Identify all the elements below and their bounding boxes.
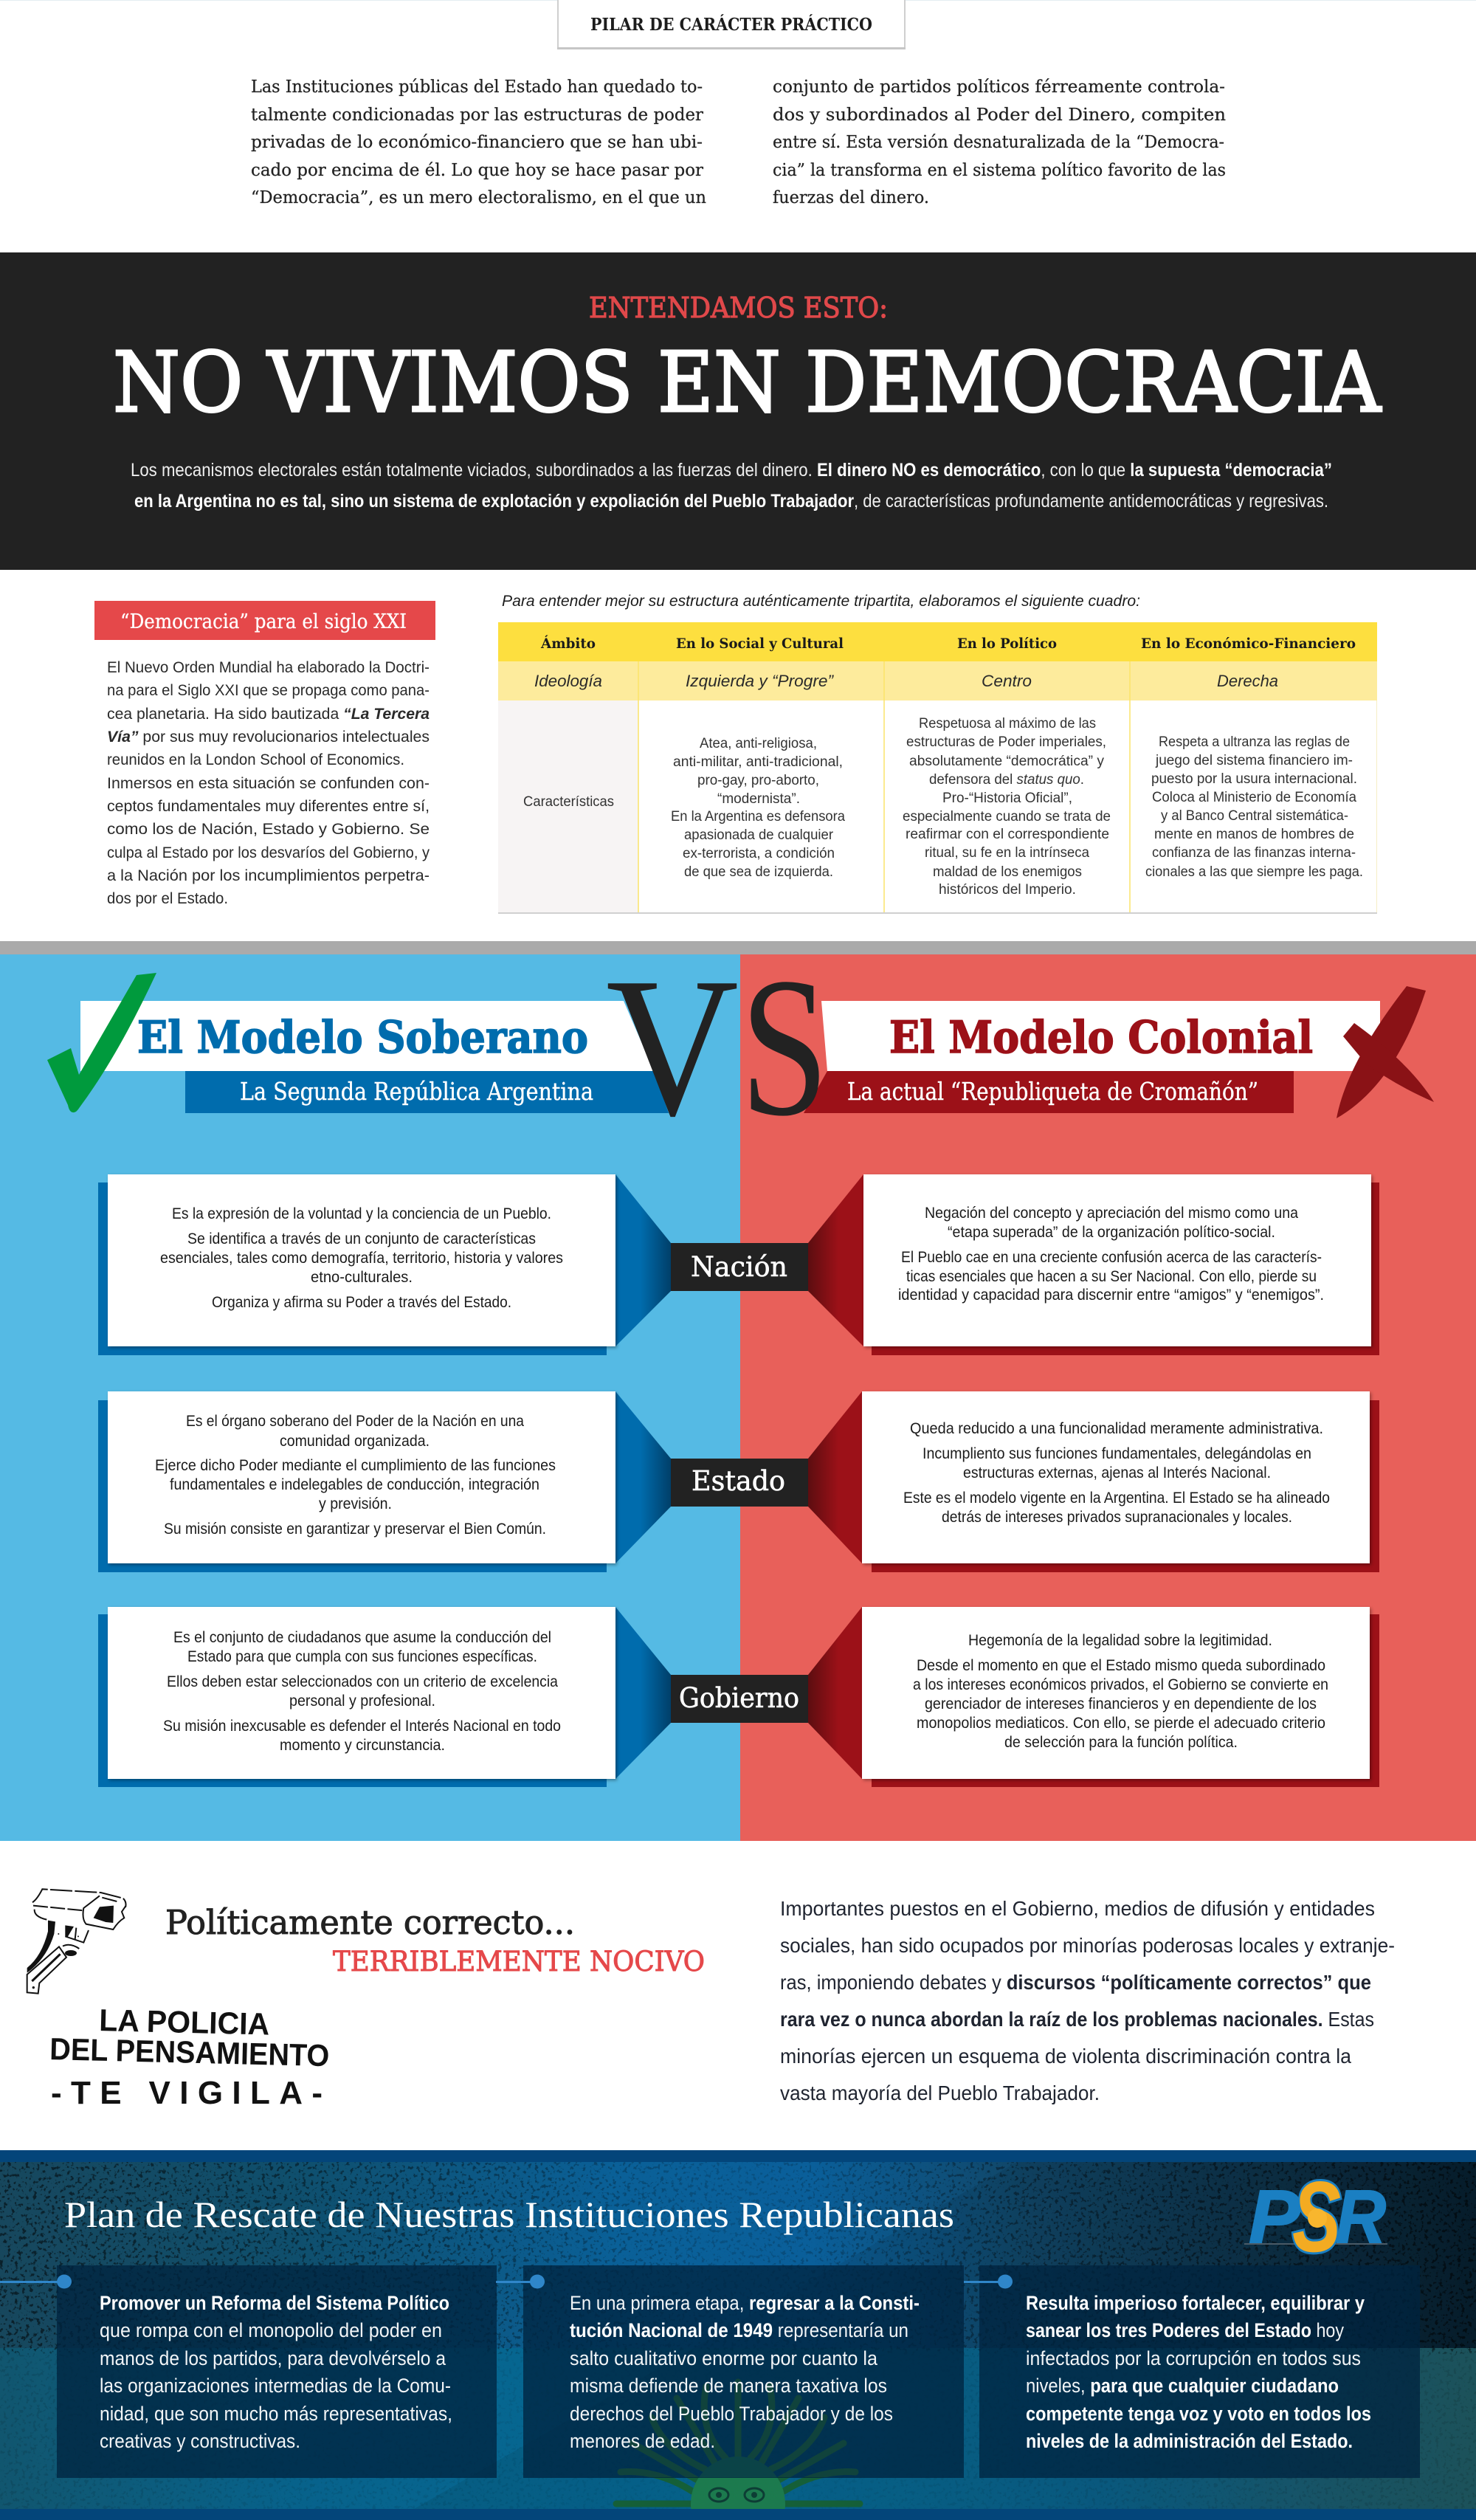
card: Estado colonial: detrás de intereses privados supranacionales y locales.: [942, 1509, 1292, 1526]
column: político: reafirmar con el correspondiente: [906, 827, 1109, 842]
card: Nación colonial: Negación del concepto y apreciación del mismo como una: [925, 1205, 1298, 1222]
card: Constitución de 1949: misma defiende de manera taxativa los: [570, 2375, 887, 2397]
card: Constitución de 1949: En una primera etapa, regresar a la Consti-: [570, 2292, 920, 2314]
main title: NO VIVIMOS EN DEMOCRACIA: [113, 335, 1382, 431]
column: político: maldad de los enemigos: [933, 864, 1082, 880]
table intro sentence: Para entender mejor su estructura auténticamente tripartita, elaboramos el siguiente cuadro:: [502, 593, 1140, 610]
card: Constitución de 1949: tución Nacional de 1949 representaría un: [570, 2319, 908, 2341]
card: Estado colonial: [808, 1391, 1379, 1572]
text block: discursos políticamente correctos: sociales, han sido ocupados por minorías poderosas locales y extranje-: [780, 1934, 1395, 1957]
card: Reforma del Sistema Político: [57, 2265, 497, 2478]
icon: flag sun: [616, 2382, 860, 2520]
logo: PSR: [1244, 2161, 1387, 2273]
icon: green check mark: [47, 973, 156, 1112]
row: Nación: [98, 1174, 1379, 1355]
side text block: na para el Siglo XXI que se propaga como pana-: [107, 682, 430, 699]
table row: ideología: Derecha: [1217, 672, 1278, 690]
card: Reforma del Sistema Político: Promover un Reforma del Sistema Político: [100, 2292, 449, 2314]
card: Constitución de 1949: [523, 2265, 964, 2478]
intro text: two columns: “Democracia”, es un mero electoralismo, en el que un: [251, 188, 706, 207]
card: Reforma del Sistema Político: las organizaciones intermedias de la Comu-: [100, 2375, 451, 2397]
intro text: two columns: Las Instituciones públicas del Estado han quedado to-: [251, 78, 703, 97]
intro text: two columns: privadas de lo económico-financiero que se han ubi-: [251, 133, 703, 152]
column: político: Respetuosa al máximo de las: [919, 716, 1096, 731]
icon: red cross mark: [1337, 986, 1434, 1118]
intro text: two columns: [251, 78, 1226, 207]
card: Nación soberano: [98, 1174, 671, 1355]
heading: El Modelo Soberano: El Modelo Soberano: [137, 1012, 588, 1064]
card: Gobierno colonial: monopolios mediaticos. Con ello, se pierde el adecuado criterio: [917, 1715, 1325, 1732]
column: social y cultural: apasionada de cualquier: [684, 827, 834, 843]
card: Gobierno colonial: a los intereses económicos privados, el Gobierno se convierte en: [913, 1676, 1328, 1693]
heading: El Modelo Colonial: El Modelo Colonial: [889, 1012, 1313, 1064]
intro text: two columns: talmente condicionadas por las estructuras de poder: [251, 106, 703, 125]
column: político: especialmente cuando se trata de: [903, 809, 1111, 824]
row: Gobierno: [98, 1607, 1379, 1787]
column: económico-financiero: confianza de las finanzas interna-: [1152, 845, 1356, 861]
table row: ideología: Ideología: [534, 672, 602, 690]
card: Estado colonial: Queda reducido a una funcionalidad meramente administrativa.: [910, 1420, 1323, 1437]
logo: PSR: P: [1249, 2175, 1300, 2259]
heading: El Modelo Colonial: La actual “Republiqueta de Cromañón”: [847, 1077, 1258, 1106]
side text block: El Nuevo Orden Mundial ha elaborado la Doctri-: [107, 659, 430, 676]
heading: Políticamente correcto: TERRIBLEMENTE NOCIVO: [333, 1946, 705, 1977]
column: económico-financiero: juego del sistema financiero im-: [1155, 753, 1353, 768]
column: económico-financiero: Coloca al Ministerio de Economía: [1152, 790, 1356, 805]
panel: versus backgrounds: [0, 954, 1476, 1841]
logo: PSR: S: [1292, 2161, 1341, 2273]
column: social y cultural: Atea, anti-religiosa,: [700, 736, 817, 751]
divider bar: [0, 941, 1476, 954]
card: Gobierno colonial: [808, 1607, 1379, 1787]
side text block: reunidos en la London School of Economics.: [107, 751, 404, 768]
card: Constitución de 1949: salto cualitativo enorme por cuanto la: [570, 2347, 878, 2369]
card: Nación soberano: esenciales, tales como demografía, territorio, historia y valores: [160, 1250, 563, 1267]
column: político: absolutamente “democrática” y: [909, 754, 1105, 769]
heading: El Modelo Soberano: [80, 1001, 669, 1113]
side text block: dos por el Estado.: [107, 890, 228, 907]
card: Nación colonial: identidad y capacidad para discernir entre “amigos” y “enemigos”.: [898, 1287, 1324, 1304]
side text block: a la Nación por los incumplimientos perpetra-: [107, 867, 430, 884]
side text block: como los de Nación, Estado y Gobierno. Se: [107, 821, 430, 838]
card: Constitución de 1949: derechos del Pueblo Trabajador y de los: [570, 2403, 893, 2425]
card: Nación colonial: “etapa superada” de la organización político-social.: [948, 1224, 1275, 1241]
card: Nación colonial: El Pueblo cae en una creciente confusión acerca de las caracterís-: [901, 1249, 1322, 1266]
card: Nación soberano: etno-culturales.: [311, 1269, 413, 1286]
card: Estado colonial: Incumpliento sus funciones fundamentales, delegándolas en: [922, 1445, 1311, 1462]
heading: Políticamente correcto: [165, 1903, 705, 1977]
text block: discursos políticamente correctos: ras, imponiendo debates y discursos “políticamente correctos” que: [780, 1971, 1371, 1994]
column: político: históricos del Imperio.: [939, 882, 1076, 898]
title: VS: V: [606, 937, 739, 1157]
card: Poderes del Estado: niveles de la administración del Estado.: [1026, 2430, 1353, 2452]
column: político: Pro-“Historia Oficial”,: [942, 791, 1072, 806]
red heading: “Democracia” para el siglo XXI: [120, 610, 407, 633]
intro text: two columns: entre sí. Esta versión desnaturalizada de la “Democra-: [773, 133, 1224, 152]
card: Poderes del Estado: competente tenga voz y voto en todos los: [1026, 2403, 1371, 2425]
connectors: timeline dots: [0, 2275, 1013, 2288]
icon: surveillance camera: [27, 1889, 126, 1994]
table row: ideología: Centro: [982, 672, 1032, 690]
card: Reforma del Sistema Político: que rompa con el monopolio del poder en: [100, 2319, 442, 2341]
red heading: [94, 601, 435, 640]
card: Estado soberano: Su misión consiste en garantizar y preservar el Bien Común.: [164, 1521, 546, 1538]
title: VS: [606, 937, 829, 1157]
table row: características: Características: [523, 794, 614, 810]
table header row: [540, 635, 1356, 652]
card: Nación colonial: ticas esenciales que hacen a su Ser Nacional. Con ello, pierde su: [906, 1268, 1317, 1285]
column: económico-financiero: puesto por la usura internacional.: [1151, 771, 1357, 787]
title: VS: S: [740, 937, 829, 1157]
card: Estado soberano: y previsión.: [319, 1495, 392, 1512]
headline explanatory text: en la Argentina no es tal, sino un sistema de explotación y expoliación del Pueblo Trabajador, de características profundamente antidemocráticas y regresivas.: [134, 491, 1328, 512]
column: político: ritual, su fe en la intrínseca: [925, 845, 1089, 861]
card: Gobierno colonial: de selección para la función política.: [1004, 1734, 1238, 1751]
column: político: estructuras de Poder imperiales,: [906, 734, 1106, 750]
card: Nación soberano: Se identifica a través de un conjunto de características: [187, 1230, 536, 1247]
column: social y cultural: pro-gay, pro-aborto,: [697, 773, 819, 788]
card: Estado colonial: estructuras externas, ajenas al Interés Nacional.: [963, 1464, 1271, 1481]
text block: discursos políticamente correctos: minorías ejercen un esquema de violenta discriminación contra la: [780, 2045, 1351, 2068]
table header row: En lo Social y Cultural: [676, 636, 844, 652]
column: social y cultural: anti-militar, anti-tradicional,: [673, 754, 843, 770]
card: Gobierno soberano: Es el conjunto de ciudadanos que asume la conducción del: [173, 1629, 551, 1646]
page top hairline: [0, 0, 1476, 1]
card: Reforma del Sistema Político: manos de los partidos, para devolvérselo a: [100, 2347, 446, 2369]
pillar tab: Pilar de carácter práctico: PILAR DE CARÁCTER PRÁCTICO: [590, 15, 872, 35]
table header row: En lo Económico-Financiero: [1141, 636, 1356, 652]
column: económico-financiero: [1145, 734, 1363, 880]
card: Gobierno colonial: gerenciador de intereses financieros y en dependiente de los: [925, 1696, 1317, 1712]
card: Gobierno colonial: Hegemonía de la legalidad sobre la legitimidad.: [968, 1632, 1272, 1649]
intro text: two columns: cia” la transforma en el sistema político favorito de las: [773, 161, 1226, 180]
stencil: La policía del pensamiento te vigila: LA POLICIA: [99, 2003, 270, 2042]
kicker: Entendamos esto: ENTENDAMOS ESTO:: [589, 292, 888, 324]
card: Poderes del Estado: infectados por la corrupción en todos sus: [1026, 2347, 1361, 2369]
panel: dark headline band: [0, 252, 1476, 570]
text block: discursos políticamente correctos: Importantes puestos en el Gobierno, medios de difusión y entidades: [780, 1897, 1375, 1920]
heading: Políticamente correcto: Políticamente correcto...: [165, 1903, 575, 1942]
card: Poderes del Estado: [979, 2265, 1420, 2478]
logo: PSR: R: [1336, 2175, 1386, 2259]
text block: discursos políticamente correctos: [780, 1897, 1395, 2104]
card: Poderes del Estado: sanear los tres Poderes del Estado hoy: [1026, 2319, 1344, 2341]
card: Gobierno soberano: Ellos deben estar seleccionados con un criterio de excelencia: [167, 1673, 558, 1690]
table header row: En lo Político: [957, 636, 1057, 652]
column: social y cultural: [671, 736, 845, 880]
column: social y cultural: “modernista”.: [717, 791, 800, 807]
pillar tab: Pilar de carácter práctico: [557, 0, 906, 49]
label: Nación: Nación: [691, 1251, 787, 1283]
column: económico-financiero: Respeta a ultranza las reglas de: [1159, 734, 1350, 750]
stencil: La policía del pensamiento te vigila: DEL PENSAMIENTO: [49, 2031, 330, 2073]
headline explanatory text: [131, 460, 1332, 512]
title: Plan de Rescate: Plan de Rescate de Nuestras Instituciones Republicanas: [64, 2194, 954, 2235]
card: Estado soberano: [98, 1391, 671, 1572]
side text block: [107, 659, 430, 907]
stencil: La policía del pensamiento te vigila: [49, 2003, 330, 2111]
card: Estado soberano: Ejerce dicho Poder mediante el cumplimiento de las funciones: [155, 1457, 556, 1474]
row: Estado: [98, 1391, 1379, 1572]
column: social y cultural: ex-terrorista, a condición: [683, 846, 835, 861]
heading: El Modelo Soberano: La Segunda República Argentina: [240, 1077, 593, 1106]
column: económico-financiero: mente en manos de hombres de: [1154, 827, 1354, 842]
card: Nación soberano: Es la expresión de la voluntad y la conciencia de un Pueblo.: [172, 1205, 551, 1222]
text block: discursos políticamente correctos: rara vez o nunca abordan la raíz de los problemas nacionales. Estas: [780, 2008, 1374, 2031]
headline explanatory text: Los mecanismos electorales están totalmente viciados, subordinados a las fuerzas del dinero. El dinero NO es democrático, con lo que la supuesta “democracia”: [131, 460, 1332, 481]
card: Nación colonial: [808, 1174, 1379, 1355]
intro text: two columns: fuerzas del dinero.: [773, 188, 929, 207]
stencil: La policía del pensamiento te vigila: -TE VIGILA-: [51, 2075, 323, 2111]
table: tripartite structure: [498, 622, 1377, 914]
card: Gobierno soberano: personal y profesional.: [289, 1693, 435, 1710]
card: Estado colonial: Este es el modelo vigente en la Argentina. El Estado se ha alineado: [903, 1490, 1330, 1507]
panel: Democracia para el siglo XXI: [94, 601, 435, 907]
table header row: Ámbito: [540, 635, 596, 652]
table row: características: [523, 716, 1363, 898]
card: Constitución de 1949: menores de edad.: [570, 2430, 715, 2452]
card: Poderes del Estado: niveles, para que cualquier ciudadano: [1026, 2375, 1339, 2397]
intro text: two columns: cado por encima de él. Lo que hoy se hace pasar por: [251, 161, 703, 180]
table row: ideología: Izquierda y “Progre”: [686, 672, 835, 690]
card: Poderes del Estado: Resulta imperioso fortalecer, equilibrar y: [1026, 2292, 1365, 2314]
card: Gobierno soberano: Estado para que cumpla con sus funciones específicas.: [187, 1648, 537, 1665]
column: económico-financiero: cionales a las que siempre les paga.: [1145, 864, 1363, 880]
card: Estado soberano: fundamentales e indelegables de conducción, integración: [170, 1476, 539, 1493]
card: Reforma del Sistema Político: creativas y constructivas.: [100, 2430, 300, 2452]
side text block: culpa al Estado por los desvaríos del Gobierno, y: [107, 844, 430, 861]
table row: ideología: [534, 672, 1278, 690]
label: Estado: Estado: [692, 1465, 785, 1497]
intro text: two columns: dos y subordinados al Poder del Dinero, compiten: [773, 106, 1226, 125]
panel: plan de rescate background: [0, 2150, 1476, 2520]
column: económico-financiero: y al Banco Central sistemática-: [1161, 808, 1348, 824]
column: político: [903, 716, 1111, 898]
label: Estado: [671, 1459, 808, 1507]
label: Nación: [671, 1243, 808, 1291]
side text block: Vía” por sus muy revolucionarios intelectuales: [107, 729, 430, 746]
card: Reforma del Sistema Político: nidad, que son mucho más representativas,: [100, 2403, 452, 2425]
label: Gobierno: [671, 1675, 808, 1723]
card: Gobierno colonial: Desde el momento en que el Estado mismo queda subordinado: [917, 1657, 1325, 1674]
heading: El Modelo Colonial: [804, 1001, 1380, 1113]
side text block: Inmersos en esta situación se confunden con-: [107, 775, 430, 792]
intro text: two columns: conjunto de partidos políticos férreamente controla-: [773, 78, 1225, 97]
side text block: cea planetaria. Ha sido bautizada “La Tercera: [107, 706, 430, 723]
text block: discursos políticamente correctos: vasta mayoría del Pueblo Trabajador.: [780, 2082, 1100, 2104]
column: social y cultural: En la Argentina es defensora: [671, 809, 845, 824]
label: Gobierno: Gobierno: [679, 1682, 799, 1714]
column: político: defensora del status quo.: [929, 772, 1084, 788]
card: Gobierno soberano: momento y circunstancia.: [280, 1737, 445, 1754]
card: Estado soberano: Es el órgano soberano del Poder de la Nación en una: [186, 1413, 524, 1430]
column: social y cultural: de que sea de izquierda.: [684, 864, 833, 880]
side text block: ceptos fundamentales muy diferentes entre sí,: [107, 798, 430, 815]
card: Gobierno soberano: Su misión inexcusable es defender el Interés Nacional en todo: [163, 1718, 561, 1735]
card: Estado soberano: comunidad organizada.: [280, 1433, 430, 1450]
card: Gobierno soberano: [98, 1607, 671, 1787]
card: Nación soberano: Organiza y afirma su Poder a través del Estado.: [212, 1294, 511, 1311]
